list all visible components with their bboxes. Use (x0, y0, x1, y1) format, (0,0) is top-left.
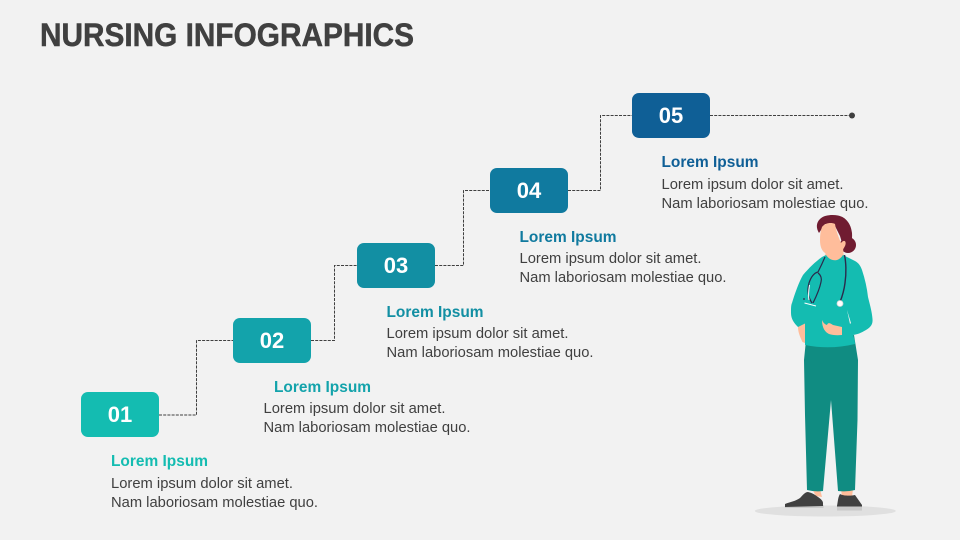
connector: 01 to 02 (159, 340, 233, 415)
step 04: Nam laboriosam molestiae quo. (520, 270, 726, 286)
step 05: Nam laboriosam molestiae quo. (662, 196, 868, 212)
step 02: Nam laboriosam molestiae quo. (264, 420, 470, 436)
back hair (817, 215, 852, 250)
step 03: Nam laboriosam molestiae quo. (386, 345, 594, 361)
step 03: Lorem ipsum dolor sit amet. (386, 326, 568, 342)
neck (825, 248, 844, 262)
step 05 (632, 93, 868, 212)
step 03 (357, 243, 594, 361)
face (820, 223, 846, 255)
connector: 04 to 05 (568, 116, 632, 190)
hair bun (840, 237, 856, 253)
trousers (804, 335, 858, 491)
step 01 (81, 392, 318, 511)
step 04 (490, 168, 726, 286)
step 05: Lorem ipsum dolor sit amet. (662, 177, 844, 193)
step 01: Lorem ipsum dolor sit amet. (111, 476, 293, 492)
step 02 (233, 318, 470, 436)
step 04: Lorem Ipsum (520, 229, 616, 246)
ground shadow (755, 506, 896, 516)
step 03: 03 (384, 253, 408, 278)
step 01: Nam laboriosam molestiae quo. (111, 495, 318, 511)
connector: 03 to 04 (435, 190, 490, 266)
title: NURSING INFOGRAPHICS (40, 17, 414, 53)
step 05: Lorem Ipsum (662, 154, 758, 171)
step 02: Lorem Ipsum (274, 379, 371, 396)
step 03: Lorem Ipsum (386, 304, 484, 321)
step 02: Lorem ipsum dolor sit amet. (264, 401, 446, 417)
step 04: 04 (517, 178, 542, 203)
right hand (822, 320, 842, 335)
connector: 05 to end dot (710, 112, 855, 118)
sweater (791, 255, 873, 347)
stethoscope (803, 255, 846, 306)
arm crease (847, 310, 851, 324)
step 05: 05 (659, 103, 683, 128)
step 04: Lorem ipsum dolor sit amet. (520, 251, 702, 267)
step 02: 02 (260, 328, 284, 353)
left hand (798, 324, 805, 343)
connector: 02 to 03 (311, 266, 357, 340)
step 01: Lorem Ipsum (111, 453, 208, 470)
shoes (785, 489, 862, 510)
step 01: 01 (108, 402, 132, 427)
nurse illustration (755, 215, 896, 516)
